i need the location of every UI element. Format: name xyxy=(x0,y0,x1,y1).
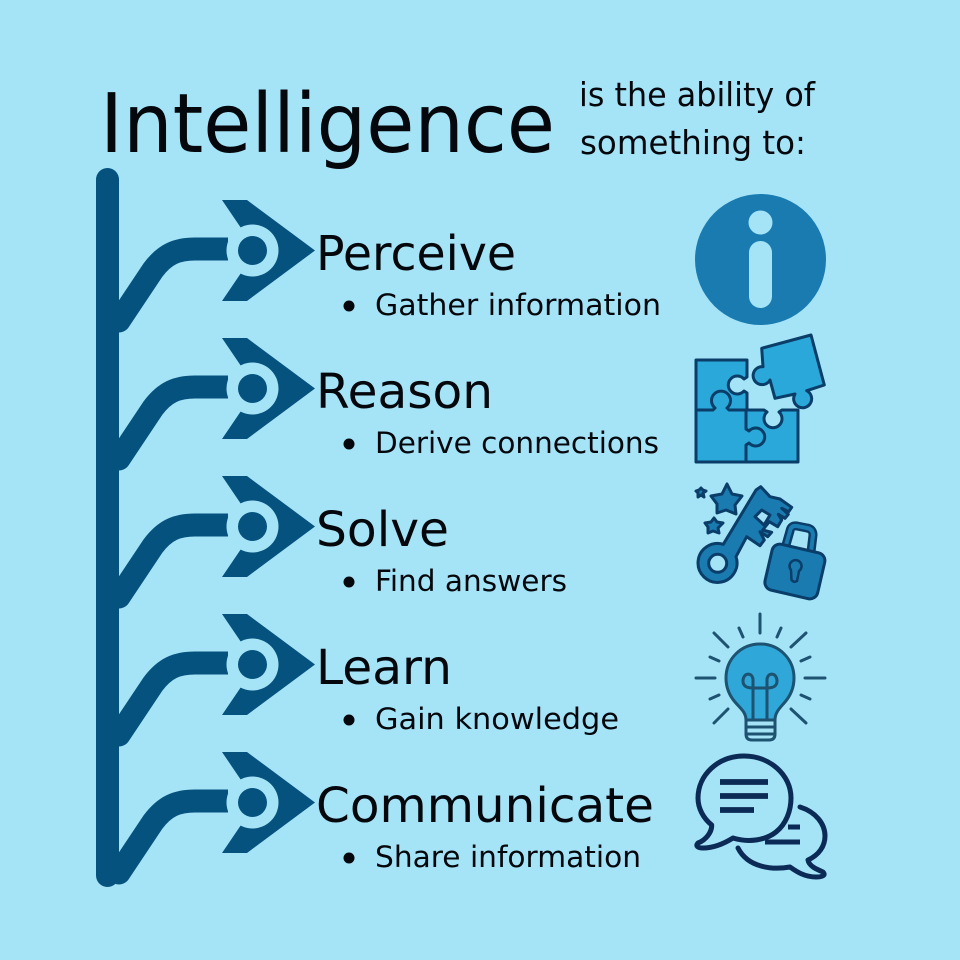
item: perceive: Perceive xyxy=(316,226,516,282)
icon: information xyxy=(695,194,826,325)
item: solve xyxy=(316,502,567,598)
vertical trunk xyxy=(96,168,119,887)
key xyxy=(698,487,792,582)
item: learn xyxy=(316,640,619,736)
item: solve: Solve xyxy=(316,502,449,558)
item: reason: Reason xyxy=(316,364,493,420)
item: communicate: Communicate xyxy=(316,778,654,834)
item: solve: Find answers xyxy=(375,564,567,598)
branch arrow: perceive xyxy=(119,200,315,321)
item: communicate xyxy=(316,778,654,874)
item: learn: Learn xyxy=(316,640,452,696)
subtitle: something to: xyxy=(580,123,806,162)
rays xyxy=(696,614,825,723)
item: learn: Gain knowledge xyxy=(375,702,619,736)
icon: speech bubbles xyxy=(697,756,825,877)
item: reason: Derive connections xyxy=(375,426,659,460)
icon: key and lock xyxy=(696,484,826,600)
subtitle xyxy=(579,75,816,162)
tiny star xyxy=(696,488,706,497)
title: Intelligence xyxy=(100,77,555,172)
large star xyxy=(711,484,742,514)
item: communicate: Share information xyxy=(375,840,641,874)
lock body xyxy=(763,543,826,600)
lock shackle xyxy=(786,526,813,552)
icon: light bulb xyxy=(696,614,825,740)
small star xyxy=(705,518,723,533)
item: perceive xyxy=(316,226,661,322)
branch arrow: reason xyxy=(119,338,315,459)
item: perceive: Gather information xyxy=(375,288,661,322)
branch arrow: learn xyxy=(119,614,315,735)
item: reason xyxy=(316,364,659,460)
branch arrow: solve xyxy=(119,476,315,597)
branch arrow: communicate xyxy=(119,752,315,873)
icon: puzzle xyxy=(696,335,824,462)
subtitle: is the ability of xyxy=(579,75,816,114)
